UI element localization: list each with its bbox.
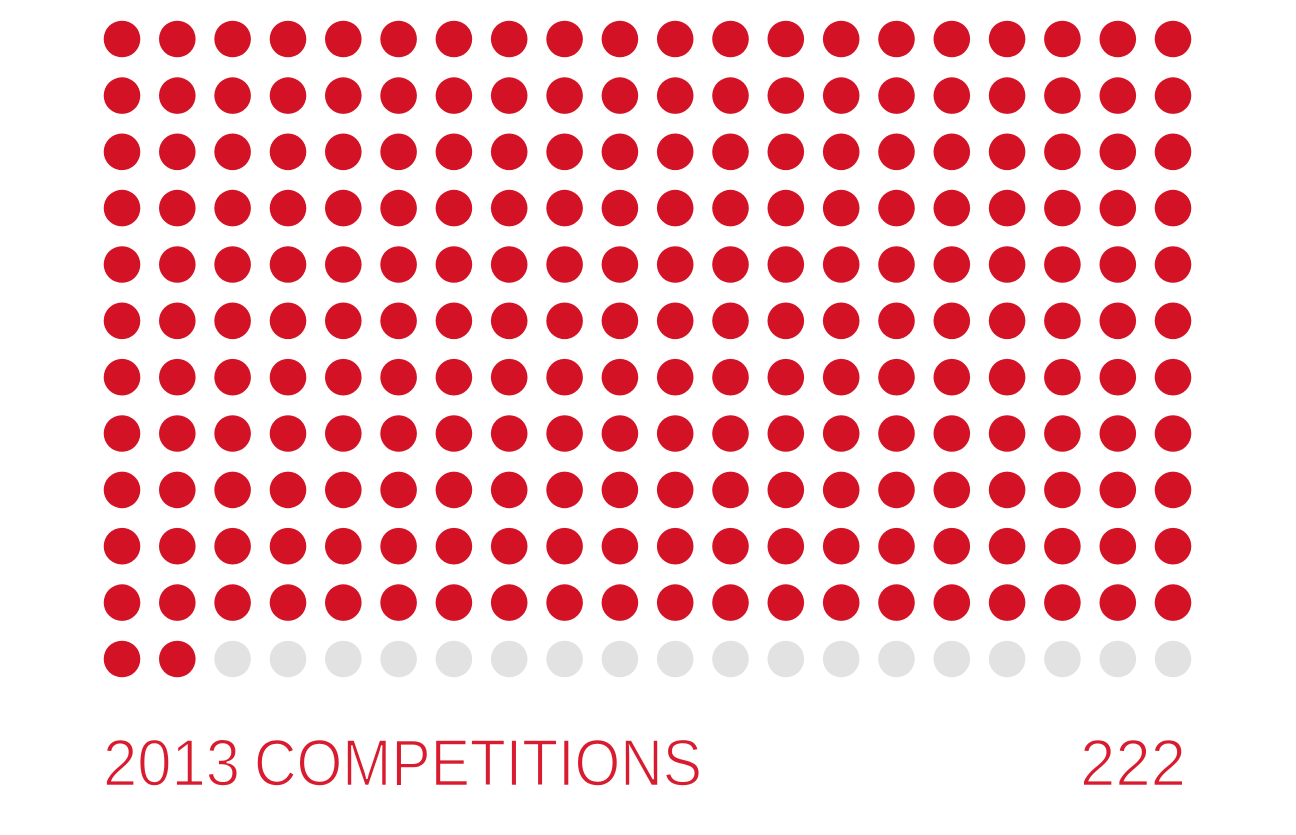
dot row 6 <box>104 302 1191 339</box>
dot row 5 <box>104 246 1191 283</box>
dot row 4 <box>104 190 1191 226</box>
dot row 8 <box>104 415 1191 452</box>
dot row 10 <box>104 528 1191 564</box>
dot row 12: two filled, eighteen empty <box>104 641 1191 677</box>
dot row 3 <box>104 134 1191 170</box>
dot row 2 <box>104 77 1191 114</box>
label: 2013 competitions: COMPETITIONS <box>254 726 702 800</box>
dot row 1 <box>104 21 1191 57</box>
dot row 11 <box>104 584 1191 621</box>
total: 222: 222 <box>1080 726 1186 800</box>
label: 2013 competitions: 2013 <box>103 726 240 800</box>
dot row 7 <box>104 359 1191 396</box>
dot row 9 <box>104 472 1191 508</box>
dot matrix: 222 of 240 dots filled <box>104 21 1191 677</box>
